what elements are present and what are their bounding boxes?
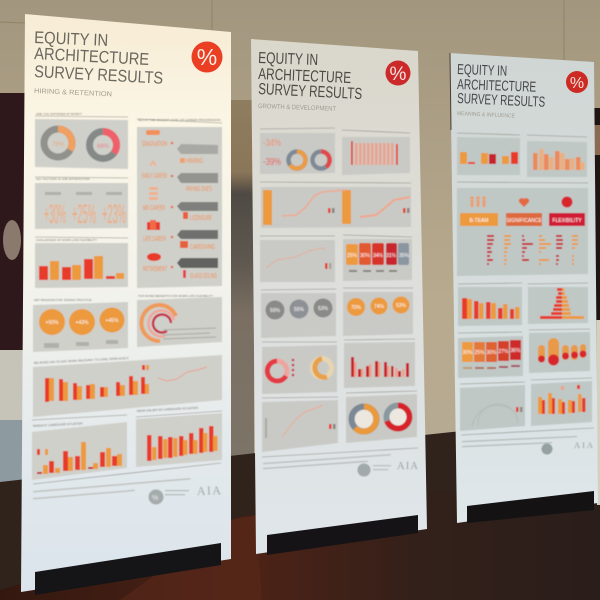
chart group: growth charts [260, 128, 417, 452]
title: hiring panel: SURVEY RESULTS [34, 62, 164, 88]
section: job satisfaction donuts [35, 112, 128, 169]
section: pyramid chart [528, 283, 588, 324]
panel: growth and development [251, 39, 427, 555]
title: hiring panel [34, 28, 164, 88]
section: percentage tags: 36% [510, 348, 521, 354]
footer: hiring panel notes and logos: % [152, 495, 158, 502]
subtitle: meaning and influence: MEANING & INFLUENCE [457, 111, 515, 120]
section: key factors stats [35, 177, 128, 229]
section: mean salary bars: MEAN SALARY BY CAREGIVER SITUATION [137, 406, 198, 413]
section: key factors stats: +30% [44, 199, 66, 229]
base: growth panel stand [267, 515, 418, 555]
section: flexibility benefits arcs: TOP RATED BENEFITS FOR WORK-LIFE FLEXIBILITY [138, 294, 213, 298]
section: orange percentage circles: 74% [374, 304, 385, 310]
footer: meaning panel notes and logos: AIA [574, 440, 594, 450]
section: mixed bars [344, 339, 415, 388]
chart group: hiring charts: +23% [102, 199, 126, 229]
section: peach bars [527, 135, 587, 177]
section: career stage timeline: LATE CAREER [143, 236, 166, 243]
section: job satisfaction donuts: 76% [52, 142, 65, 148]
section: job-seeking circles: NET REASONS FOR JOINING PRACTICE [34, 298, 92, 302]
title: meaning panel: EQUITY IN [457, 62, 507, 80]
icon: heart [519, 198, 529, 207]
subtitle: growth and development: GROWTH & DEVELOPMENT [258, 103, 336, 113]
chart group: meaning charts [457, 133, 592, 431]
icon: percent badge: % [390, 64, 407, 85]
title: growth panel: ARCHITECTURE [258, 66, 351, 87]
panel: meaning and influence [450, 53, 598, 523]
section: career stage timeline: CAREGIVING [190, 244, 215, 251]
section: work-life flexibility bars [35, 237, 128, 288]
icon: percent badge: % [570, 75, 584, 92]
title: growth panel: EQUITY IN [258, 50, 318, 69]
section: key factors stats: +25% [72, 199, 96, 229]
section: influence categories: B-TEAM [470, 218, 488, 224]
section: job satisfaction donuts: 66% [97, 144, 110, 150]
section: pay by tenure curves [260, 182, 411, 228]
section: career stage timeline: MID CAREER [143, 205, 165, 212]
section: job-seeking circles: +45% [106, 318, 119, 324]
base: hiring panel stand [35, 543, 221, 595]
title: growth panel [258, 50, 363, 103]
section: salary tags: 34% [373, 253, 384, 259]
section: career stage timeline: GRADUATION [142, 141, 167, 148]
chart group: hiring charts [32, 112, 222, 480]
section: progression curve [262, 397, 338, 452]
section: networking donuts [262, 342, 337, 394]
icon: graduation [146, 130, 160, 135]
section: promotion percentages and donuts [260, 128, 335, 174]
section: promotion percentages and donuts: -34% [263, 138, 281, 149]
section: career stage timeline: LICENSURE [190, 215, 212, 222]
footer: growth panel notes and logos: AIA [397, 461, 418, 472]
section: orange percentage circles: 70% [351, 305, 362, 311]
section: salary tags: 30% [360, 253, 371, 259]
section: promotion percentages and donuts: -39% [263, 157, 281, 168]
section: red and orange pairs [458, 283, 522, 326]
section: work-life flexibility bars: CHALLENGES OF WORK-LIFE FLEXIBILITY [36, 238, 97, 242]
section: gray percentage circles: 53% [318, 306, 329, 312]
section: job-seeking circles [33, 298, 128, 352]
section: career stage timeline: SEX AT THE HIGHEST LEVEL OF CAREER PROGRESSION [138, 118, 221, 122]
section: parents caregiver bars: PARENTS' CAREGIVER SITUATION [33, 421, 83, 428]
subtitle: hiring and retention: HIRING & RETENTION [34, 88, 112, 98]
section: career stage timeline: RETIREMENT [143, 266, 167, 273]
section: orange percentage circles: 53% [396, 303, 407, 309]
section: pale arc chart [460, 382, 525, 431]
icon: percent badge [192, 42, 222, 72]
panel: hiring and retention [21, 14, 231, 595]
footer: hiring panel notes and logos: AIA [197, 483, 221, 498]
section: influence categories [457, 182, 588, 276]
section: career donuts [346, 391, 417, 443]
section: job-seeking circles: +50% [46, 320, 59, 326]
section: salary tags [343, 235, 412, 281]
title: growth panel: SURVEY RESULTS [258, 81, 363, 103]
icon: target [562, 196, 572, 208]
section: percentage tags: 27% [498, 349, 509, 355]
section: salary by experience scatter [260, 236, 335, 282]
footer: growth panel notes and logos [262, 448, 418, 476]
section: influence categories: FLEXIBILITY [552, 218, 582, 224]
section: mean salary bars [136, 406, 222, 467]
icon: people [470, 196, 486, 207]
section: flexibility benefits arcs [137, 294, 222, 347]
section: orange percentage circles [343, 288, 413, 336]
section: orange dotted bars [531, 378, 592, 426]
section: relevance bars and trend line [33, 355, 222, 417]
icon: percent badge [566, 71, 588, 93]
section: career stage timeline: EARLY CAREER [142, 173, 167, 180]
section: salary tags: 31% [386, 253, 397, 259]
icon: percent badge [386, 60, 410, 86]
section: career stage timeline: HIRING [186, 158, 203, 165]
title: hiring panel: ARCHITECTURE [34, 44, 150, 69]
section: relevance bars and trend line: BELIEVED DAY-TO-DAY WORK RELEVANT TO LONG-TERM GOALS [34, 356, 129, 365]
section: influence categories: SIGNIFICANCE [506, 218, 542, 224]
footer: hiring panel notes and logos [33, 463, 221, 504]
title: meaning panel: SURVEY RESULTS [457, 91, 545, 111]
icon: percent badge: % [197, 44, 217, 70]
section: gray percentage circles [261, 289, 336, 338]
section: pink striped bars [342, 130, 410, 175]
section: gray percentage circles: 55% [294, 307, 305, 313]
section: job satisfaction donuts: ARE YOU SATISFIED AT WORK? [36, 112, 82, 116]
title: meaning panel: ARCHITECTURE [457, 77, 537, 96]
section: percentage tags: 30% [486, 350, 497, 356]
section: career stage timeline: GLASS CEILING [190, 273, 217, 280]
section: percentage tags: 25% [474, 350, 485, 356]
section: career stage timeline [137, 118, 222, 288]
section: key factors stats: KEY FACTORS IN JOB SATISFACTION [36, 177, 90, 181]
base: meaning panel stand [467, 491, 594, 523]
section: salary tags: 35% [399, 253, 410, 259]
section: job-seeking circles: +43% [76, 320, 89, 326]
section: gray percentage circles: 59% [270, 308, 281, 314]
footer: meaning panel notes and logos [461, 428, 594, 454]
section: capsule chart [529, 329, 590, 373]
section: percentage tags [458, 332, 523, 378]
section: career stage timeline: PAYING DUES [186, 186, 212, 193]
section: paired bars [457, 133, 520, 175]
section: salary tags: 25% [347, 253, 358, 259]
section: parents caregiver bars [32, 415, 127, 480]
section: percentage tags: 30% [462, 350, 473, 356]
title: meaning panel [457, 62, 545, 111]
title: hiring panel: EQUITY IN [34, 28, 109, 50]
